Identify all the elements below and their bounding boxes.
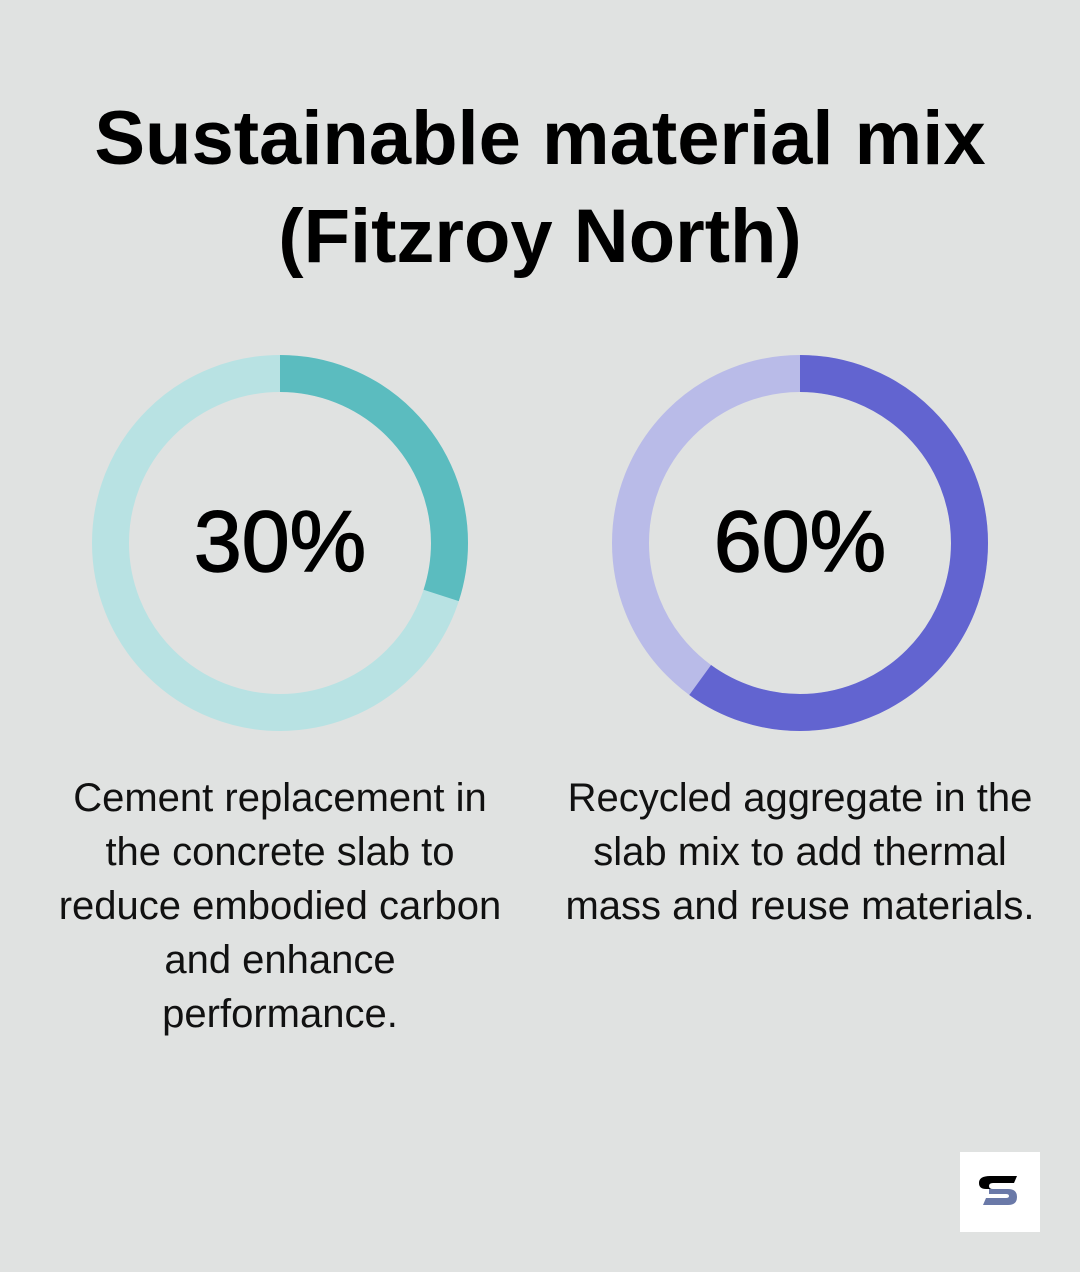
icon: logo xyxy=(960,1152,1040,1232)
title: Sustainable material mix xyxy=(94,96,986,181)
text: cement replacement: the concrete slab to xyxy=(105,830,455,874)
text: cement replacement: Cement replacement in xyxy=(73,776,487,820)
text: cement replacement: performance. xyxy=(162,992,398,1036)
donut chart: 60% xyxy=(612,355,988,731)
text: recycled aggregate: slab mix to add thermal xyxy=(593,830,1007,874)
title xyxy=(94,96,986,279)
donut chart: 30%: 30% xyxy=(194,494,366,590)
title: (Fitzroy North) xyxy=(278,194,802,279)
text: cement replacement xyxy=(59,776,501,1036)
text: recycled aggregate xyxy=(565,776,1035,928)
text: recycled aggregate: mass and reuse materials. xyxy=(565,884,1035,928)
donut chart: 60%: 60% xyxy=(714,494,886,590)
donut chart: 30% xyxy=(92,355,468,731)
text: cement replacement: reduce embodied carbon xyxy=(59,884,501,928)
text: cement replacement: and enhance xyxy=(164,938,396,982)
text: recycled aggregate: Recycled aggregate in the xyxy=(568,776,1032,820)
